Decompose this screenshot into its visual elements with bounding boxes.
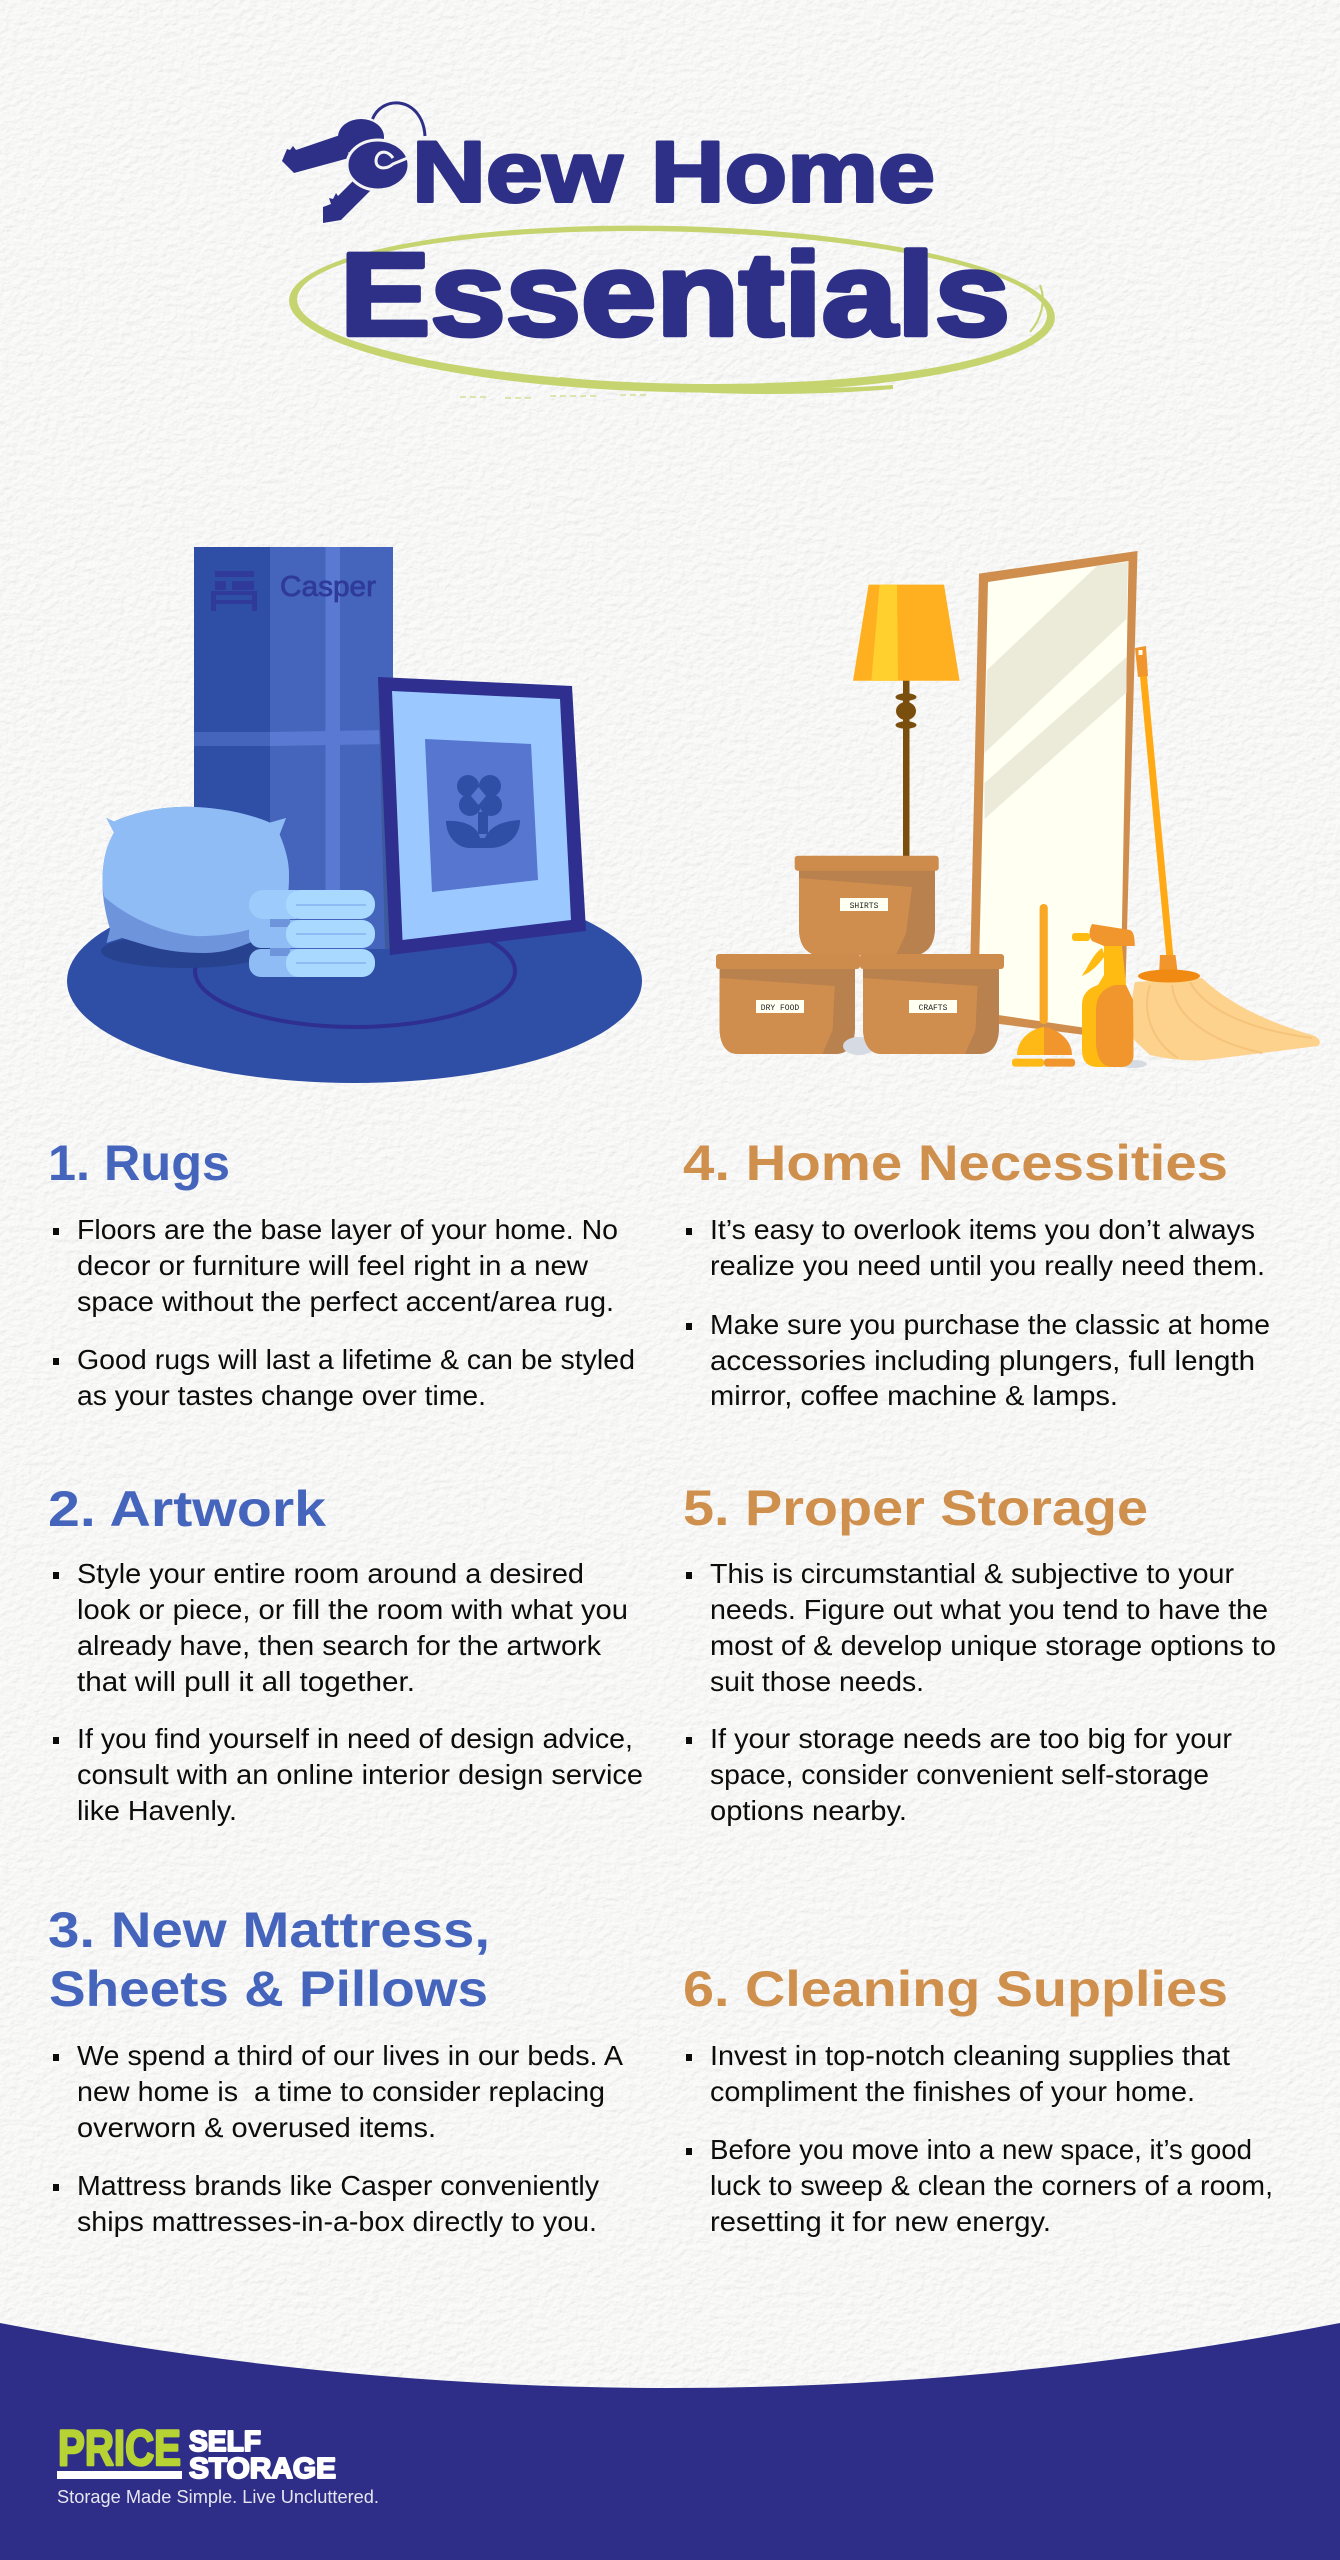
- bullet text: Invest in top-notch cleaning supplies that: [710, 2040, 1230, 2071]
- section 1: rugs: [48, 1135, 635, 1411]
- bullet text: space, consider convenient self-storage: [710, 1759, 1209, 1790]
- bullet text: compliment the finishes of your home.: [710, 2076, 1195, 2107]
- bullet text: most of & develop unique storage options to: [710, 1630, 1276, 1661]
- tagline: Storage Made Simple. Live Uncluttered.: [57, 2487, 379, 2507]
- bullet text: [686, 1214, 1270, 1411]
- logo: [57, 2420, 336, 2485]
- bullet text: needs. Figure out what you tend to have the: [710, 1594, 1268, 1625]
- heading: 6. Cleaning Supplies: [683, 1961, 1228, 2017]
- bullet text: consult with an online interior design service: [77, 1759, 643, 1790]
- bullet text: If you find yourself in need of design advice,: [77, 1723, 633, 1754]
- bullet text: like Havenly.: [77, 1795, 237, 1826]
- mop: [1131, 646, 1320, 1060]
- bullet text: [53, 1558, 643, 1826]
- mirror: [969, 551, 1138, 1040]
- bullet text: decor or furniture will feel right in a new: [77, 1250, 589, 1281]
- storage box: shirts: [795, 856, 939, 955]
- icon: keys: [282, 103, 425, 223]
- bullet text: This is circumstantial & subjective to your: [710, 1558, 1234, 1589]
- storage box: crafts: [843, 954, 1004, 1055]
- bullet text: realize you need until you really need them.: [710, 1250, 1265, 1281]
- illustration: orange household items: [716, 551, 1320, 1068]
- storage box: shirts: SHIRTS: [850, 902, 879, 911]
- bullet text: mirror, coffee machine & lamps.: [710, 1380, 1118, 1411]
- bullet text: new home is a time to consider replacing: [77, 2076, 605, 2107]
- bullet text: as your tastes change over time.: [77, 1380, 486, 1411]
- bullet text: Make sure you purchase the classic at home: [710, 1309, 1270, 1340]
- section 3: new mattress, sheets and pillows: [48, 1902, 623, 2237]
- mattress box: [194, 547, 393, 949]
- footer band: [0, 2323, 1340, 2560]
- bullet text: Floors are the base layer of your home. No: [77, 1214, 618, 1245]
- bullet text: look or piece, or fill the room with what you: [77, 1594, 628, 1625]
- logo: STORAGE: [189, 2453, 336, 2485]
- bullet text: luck to sweep & clean the corners of a room,: [710, 2170, 1273, 2201]
- bullet text: Style your entire room around a desired: [77, 1558, 584, 1589]
- bullet text: resetting it for new energy.: [710, 2206, 1051, 2237]
- section 6: cleaning supplies: [683, 1961, 1273, 2237]
- folded towels: [249, 890, 375, 977]
- brand text: Casper: [280, 571, 376, 603]
- spray bottle: [1072, 924, 1147, 1068]
- title: [282, 103, 1057, 401]
- logo: PRICE: [58, 2420, 181, 2476]
- bullet text: If your storage needs are too big for your: [710, 1723, 1232, 1754]
- bullet text: [686, 1558, 1276, 1826]
- heading: 5. Proper Storage: [683, 1480, 1148, 1536]
- heading: 1. Rugs: [48, 1135, 230, 1191]
- heading: [48, 1902, 490, 2017]
- bullet text: [53, 1214, 635, 1411]
- bullet text: [686, 2040, 1273, 2237]
- title line: New Home: New Home: [412, 124, 935, 220]
- heading: 4. Home Necessities: [683, 1135, 1228, 1191]
- logo: SELF: [189, 2426, 261, 2458]
- section 5: proper storage: [683, 1480, 1276, 1826]
- bullet text: ships mattresses-in-a-box directly to you.: [77, 2206, 597, 2237]
- pillow: [101, 807, 289, 968]
- storage box: dry food: DRY FOOD: [761, 1004, 799, 1013]
- section 4: home necessities: [683, 1135, 1270, 1411]
- plunger: [1012, 904, 1075, 1067]
- bullet text: accessories including plungers, full length: [710, 1345, 1255, 1376]
- scribble ellipse: [287, 217, 1057, 401]
- bullet text: Before you move into a new space, it’s good: [710, 2134, 1252, 2165]
- floor lamp: [853, 585, 960, 857]
- bullet text: overworn & overused items.: [77, 2112, 436, 2143]
- bullet text: that will pull it all together.: [77, 1666, 415, 1697]
- bed icon: [211, 571, 257, 611]
- bullet text: We spend a third of our lives in our beds. A: [77, 2040, 623, 2071]
- storage box: dry food: [716, 954, 860, 1054]
- rug: [67, 879, 642, 1083]
- bullet text: already have, then search for the artwork: [77, 1630, 602, 1661]
- bullet text: Good rugs will last a lifetime & can be styled: [77, 1344, 635, 1375]
- bullet text: It’s easy to overlook items you don’t always: [710, 1214, 1255, 1245]
- heading: 2. Artwork: [48, 1481, 326, 1537]
- bullet text: options nearby.: [710, 1795, 907, 1826]
- bullet text: suit those needs.: [710, 1666, 924, 1697]
- heading: 3. New Mattress,: [48, 1902, 490, 1958]
- illustration: blue bedroom items: [67, 547, 642, 1083]
- flower art: [446, 775, 520, 848]
- picture frame: [378, 677, 586, 955]
- bullet text: space without the perfect accent/area rug.: [77, 1286, 614, 1317]
- section 2: artwork: [48, 1481, 643, 1826]
- heading: Sheets & Pillows: [49, 1961, 488, 2017]
- storage box: crafts: CRAFTS: [919, 1004, 948, 1013]
- title line: Essentials: Essentials: [340, 229, 1010, 361]
- bullet text: Mattress brands like Casper conveniently: [77, 2170, 599, 2201]
- bullet text: [53, 2040, 623, 2237]
- footer: [0, 2323, 1340, 2560]
